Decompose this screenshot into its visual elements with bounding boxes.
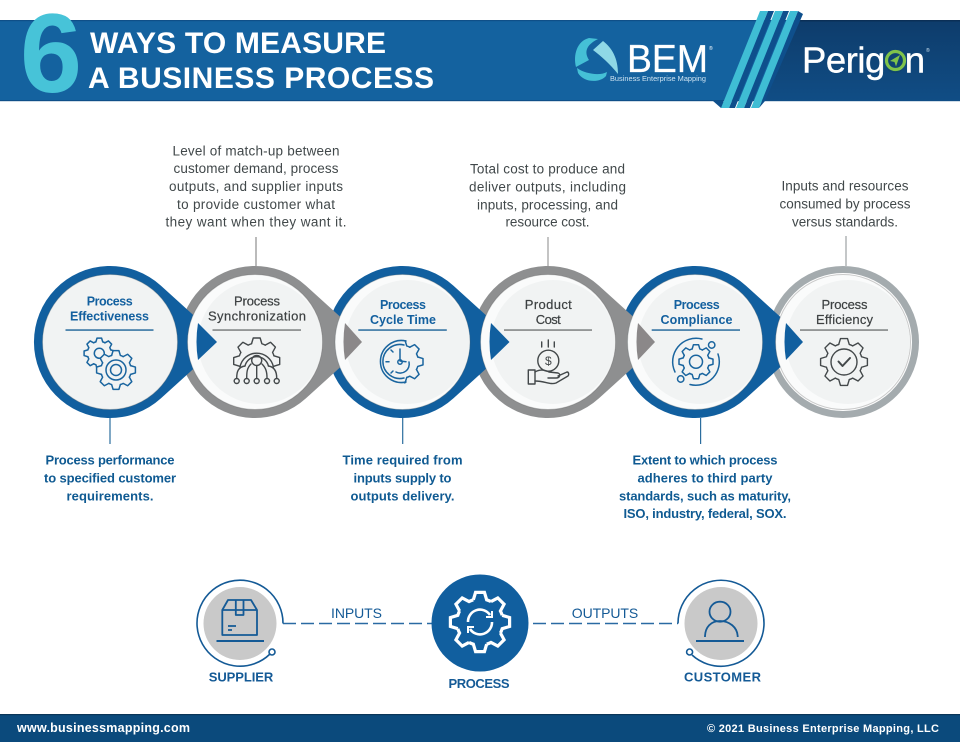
supplier node [197,580,283,685]
top description: process synchronization: outputs, and supplier inputs [169,179,343,194]
step 6: process efficiency: Efficiency [816,312,874,327]
icon: gears [84,338,135,389]
supplier node: SUPPLIER [209,670,274,685]
Perigon logo: ® [926,47,930,54]
icon: coin over hand: $ [545,354,552,368]
step 1: process effectiveness [42,274,178,410]
step 4: product cost [480,274,616,410]
step 4: product cost: Product [525,297,572,312]
step 2: process synchronization [188,274,322,410]
inputs connector: INPUTS [331,605,382,621]
top description: process synchronization: Level of match-up between [172,144,340,158]
bottom description: process effectiveness [44,418,176,504]
top description: product cost [469,161,626,266]
bottom description: process compliance: Extent to which process [632,452,778,467]
top description: process efficiency: consumed by process [780,196,911,212]
step 5: process compliance: Compliance [660,313,733,327]
header banner [0,20,960,101]
step 3: process cycle time: Process [380,298,426,312]
top description: process efficiency: versus standards. [792,215,898,230]
customer node: CUSTOMER [684,670,762,685]
bottom description: process compliance: adheres to third party [638,470,773,486]
header stripes [713,11,803,108]
BEM logo: BEM [627,38,708,81]
top description: process synchronization: they want when they want it. [166,214,346,230]
step 6: process efficiency: Process [822,297,868,312]
BEM logo [575,38,713,83]
outputs connector: OUTPUTS [572,605,638,621]
step 1: process effectiveness: Effectiveness [70,310,149,324]
top description: process efficiency: Inputs and resources [782,179,909,194]
bottom description: process cycle time: inputs supply to [354,470,452,486]
step 6: process efficiency [776,274,910,410]
icon: package box [216,600,264,641]
customer node [678,580,764,685]
icon: efficiency gear with check [821,339,867,385]
step 2: process synchronization: Synchronization [208,309,306,324]
step 4: product cost: Cost [536,312,561,327]
icon: process gear with cycle arrows [450,592,510,652]
bottom description: process effectiveness: requirements. [66,488,154,504]
Perigon logo: Perigon [802,40,925,80]
bottom description: process cycle time: outputs delivery. [350,488,454,504]
top description: product cost: resource cost. [506,215,590,230]
title [88,27,434,95]
icon: clock gear [380,340,423,383]
top description: process efficiency [780,179,911,266]
process node: PROCESS [448,676,510,691]
outer rings chain [34,266,915,418]
bottom description: process compliance: ISO, industry, federal, SOX. [624,506,786,521]
bottom description: process cycle time [342,418,462,504]
icon: person [696,602,744,641]
BEM logo: Business Enterprise Mapping [610,76,706,83]
BEM logo: ® [709,45,713,52]
step 5: process compliance: Process [674,298,720,312]
step 3: process cycle time: Cycle Time [370,313,436,327]
icon: compliance gear [673,338,719,385]
step 3: process cycle time [335,274,470,410]
bottom description: process compliance: standards, such as maturity, [619,488,791,504]
footer bar [0,714,960,742]
bottom description: process effectiveness: Process performance [46,452,174,467]
title: A BUSINESS PROCESS [88,62,434,95]
footer bar: © 2021 Business Enterprise Mapping, LLC [707,723,939,735]
top description: process synchronization: customer demand, process [174,161,339,176]
footer bar: www.businessmapping.com [16,721,190,735]
title: WAYS TO MEASURE [90,27,386,60]
process node [432,574,528,691]
step 5: process compliance [628,274,762,410]
top description: product cost: Total cost to produce and [470,161,625,176]
top description: process synchronization: to provide customer what [177,197,335,212]
step 1: process effectiveness: Process [87,295,133,309]
icon: synchronization gear [234,338,280,384]
top description: product cost: inputs, processing, and [477,198,618,212]
step 2: process synchronization: Process [234,294,280,309]
top description: process synchronization [166,144,346,266]
bottom description: process cycle time: Time required from [342,452,462,467]
top description: product cost: deliver outputs, including [469,180,626,194]
bottom description: process compliance [619,418,791,521]
bottom description: process effectiveness: to specified customer [44,470,176,486]
